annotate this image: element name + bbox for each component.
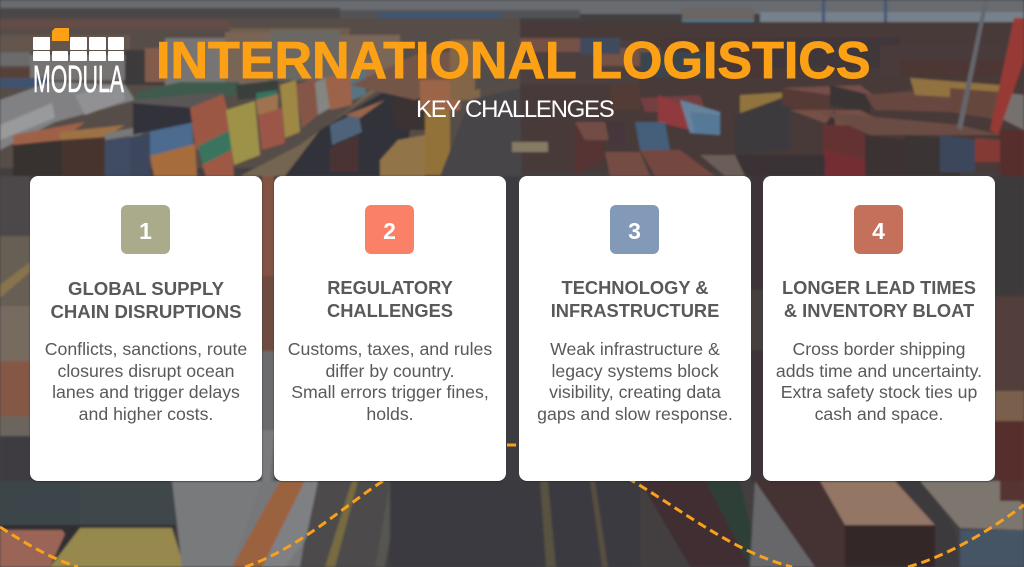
body text 1: closures disrupt ocean bbox=[58, 361, 234, 381]
panel: card 4 bbox=[763, 176, 995, 481]
body text 1: and higher costs. bbox=[79, 404, 213, 424]
body text 4 bbox=[776, 339, 982, 424]
badge 4: 4 bbox=[872, 218, 885, 244]
body text 4: Extra safety stock ties up bbox=[781, 382, 977, 402]
panel: card 2 bbox=[274, 176, 506, 481]
heading 4: LONGER LEAD TIMES bbox=[782, 277, 976, 298]
panel: card 1 bbox=[30, 176, 262, 481]
heading 3: TECHNOLOGY & bbox=[562, 277, 708, 298]
body text 2 bbox=[288, 339, 492, 424]
heading 1: CHAIN DISRUPTIONS bbox=[50, 301, 242, 322]
body text 1 bbox=[45, 339, 247, 424]
heading 2 bbox=[327, 277, 453, 321]
heading 4: & INVENTORY BLOAT bbox=[784, 300, 974, 321]
badge 2: 2 bbox=[383, 218, 396, 244]
body text 4: cash and space. bbox=[815, 404, 943, 424]
badge 1: 1 bbox=[139, 218, 152, 244]
body text 3: gaps and slow response. bbox=[537, 404, 733, 424]
badge 2 bbox=[365, 205, 414, 254]
body text 2: Customs, taxes, and rules bbox=[288, 339, 492, 359]
dashed route line bbox=[0, 445, 1024, 567]
body text 3 bbox=[537, 339, 733, 424]
body text 2: holds. bbox=[366, 404, 414, 424]
badge 3: 3 bbox=[628, 218, 641, 244]
body text 2: differ by country. bbox=[325, 361, 455, 381]
badge 4 bbox=[854, 205, 903, 254]
body text 3: legacy systems block bbox=[551, 361, 719, 381]
panel: card 3 bbox=[519, 176, 751, 481]
heading 2: CHALLENGES bbox=[327, 300, 453, 321]
heading 4 bbox=[782, 277, 976, 321]
badge 3 bbox=[610, 205, 659, 254]
body text 4: Cross border shipping bbox=[792, 339, 966, 359]
badge 1 bbox=[121, 205, 170, 254]
heading 1 bbox=[50, 278, 242, 322]
bottom bbox=[0, 481, 175, 533]
title: INTERNATIONAL LOGISTICS bbox=[156, 32, 871, 90]
body text 1: Conflicts, sanctions, route bbox=[45, 339, 247, 359]
logo: Modula bbox=[33, 28, 124, 96]
body text 3: Weak infrastructure & bbox=[550, 339, 720, 359]
heading 2: REGULATORY bbox=[327, 277, 453, 298]
strips bbox=[0, 176, 30, 236]
heading 1: GLOBAL SUPPLY bbox=[68, 278, 224, 299]
heading 3: INFRASTRUCTURE bbox=[551, 300, 719, 321]
subtitle: KEY CHALLENGES bbox=[416, 96, 613, 123]
body text 1: lanes and trigger delays bbox=[52, 382, 240, 402]
heading 3 bbox=[551, 277, 719, 321]
body text 4: adds time and uncertainty. bbox=[776, 361, 982, 381]
body text 2: Small errors trigger fines, bbox=[291, 382, 489, 402]
body text 3: visibility, creating data bbox=[549, 382, 721, 402]
